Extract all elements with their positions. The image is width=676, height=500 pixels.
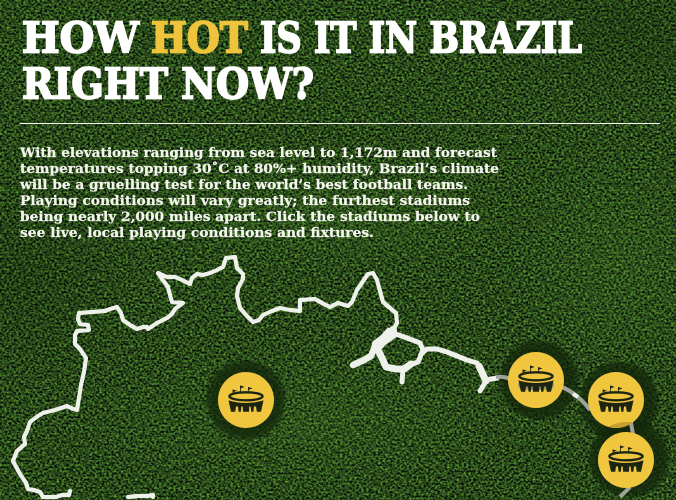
stadium marker: Fortaleza xyxy=(508,352,564,408)
intro text: temperatures topping 30˚C at 80%+ humidity, Brazil’s climate xyxy=(20,161,499,177)
map: Brazil northern border xyxy=(13,257,497,497)
title: IS IT IN BRAZIL xyxy=(260,14,582,62)
intro text: will be a gruelling test for the world’s best football teams. xyxy=(19,178,468,193)
intro text: being nearly 2,000 miles apart. Click the stadiums below to xyxy=(20,210,480,225)
intro text: With elevations ranging from sea level to 1,172m and forecast xyxy=(19,146,497,161)
marker shadows xyxy=(205,339,670,499)
intro text xyxy=(19,146,499,241)
stadium marker: Natal xyxy=(588,372,644,428)
map: grey coastline continuation xyxy=(496,377,633,497)
title: RIGHT NOW? xyxy=(22,60,314,108)
intro text: see live, local playing conditions and fixtures. xyxy=(20,226,374,241)
stadium marker: Recife xyxy=(598,432,654,488)
title: HOW xyxy=(22,14,140,62)
map: white coast fragment xyxy=(573,394,578,397)
stadium marker: Manaus xyxy=(218,372,274,428)
intro text: Playing conditions will vary greatly; the furthest stadiums xyxy=(20,194,470,209)
divider rule xyxy=(20,123,660,124)
title: HOT xyxy=(151,14,248,62)
title xyxy=(22,14,582,108)
